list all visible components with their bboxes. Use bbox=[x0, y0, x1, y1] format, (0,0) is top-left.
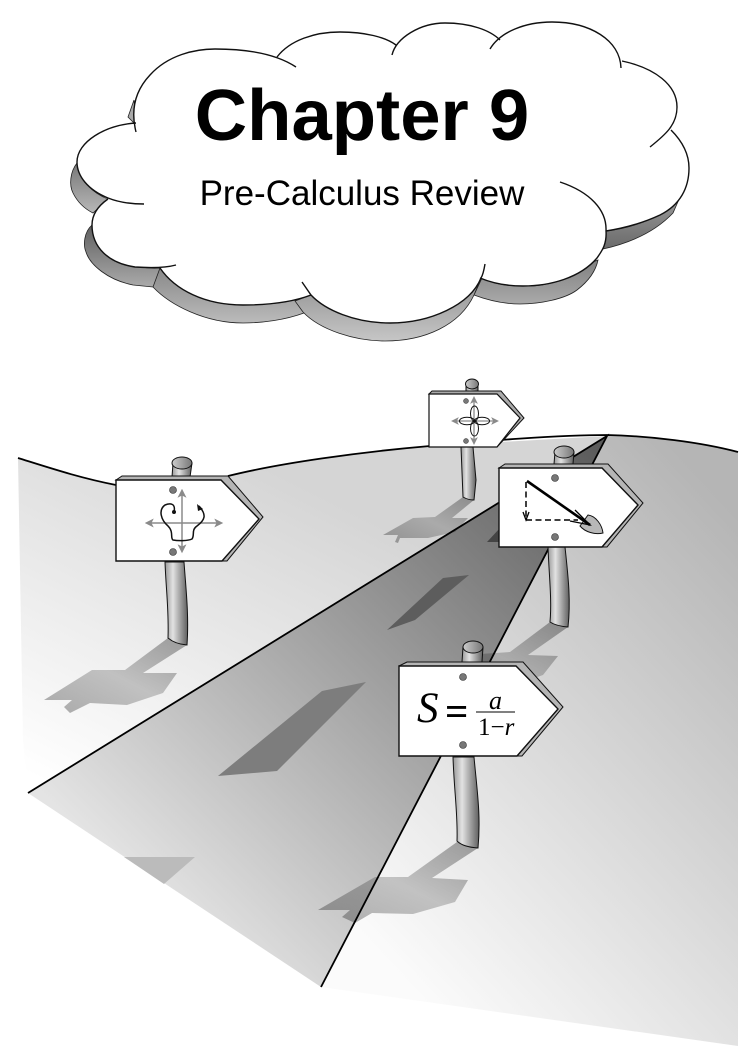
post bbox=[453, 757, 479, 848]
subtitle: Pre-Calculus Review bbox=[200, 174, 525, 213]
right hill bbox=[321, 435, 738, 1046]
left hill bbox=[18, 436, 607, 793]
sign board bbox=[399, 662, 563, 756]
cloud 3D shadow bbox=[71, 100, 680, 341]
post bbox=[165, 562, 188, 645]
title: Chapter 9 bbox=[195, 75, 529, 156]
rose graph bbox=[453, 398, 497, 443]
sign board bbox=[116, 476, 263, 561]
formula: S bbox=[417, 685, 438, 732]
cloud banner bbox=[71, 22, 689, 341]
cloud outline bbox=[77, 22, 689, 323]
post bbox=[548, 547, 569, 627]
formula: = bbox=[445, 688, 468, 734]
formula bbox=[417, 685, 515, 741]
signpost 4: geometric series formula bbox=[399, 641, 563, 848]
formula: 1−r bbox=[478, 714, 515, 741]
signpost 1: curve graph bbox=[116, 457, 263, 645]
shadow: sign 1 bbox=[44, 638, 187, 713]
sign board bbox=[499, 464, 643, 547]
shadow: sign 4 bbox=[318, 842, 478, 923]
vector diagram bbox=[523, 481, 603, 534]
shadow: sign 3 bbox=[430, 622, 568, 690]
shadow: sign 2 bbox=[383, 497, 474, 543]
sign board bbox=[429, 391, 524, 447]
shadows of the signposts bbox=[44, 497, 568, 923]
formula: a bbox=[489, 686, 502, 715]
signpost 3: vector projection bbox=[499, 446, 643, 627]
landscape ground bbox=[18, 435, 738, 1046]
curve graph bbox=[147, 491, 221, 551]
road surface bbox=[28, 436, 607, 987]
signpost 2: polar rose bbox=[429, 379, 524, 500]
post bbox=[461, 447, 476, 500]
cloud body fill bbox=[77, 22, 689, 323]
road centre dashes bbox=[124, 528, 505, 884]
horizon and road lines bbox=[18, 435, 738, 987]
